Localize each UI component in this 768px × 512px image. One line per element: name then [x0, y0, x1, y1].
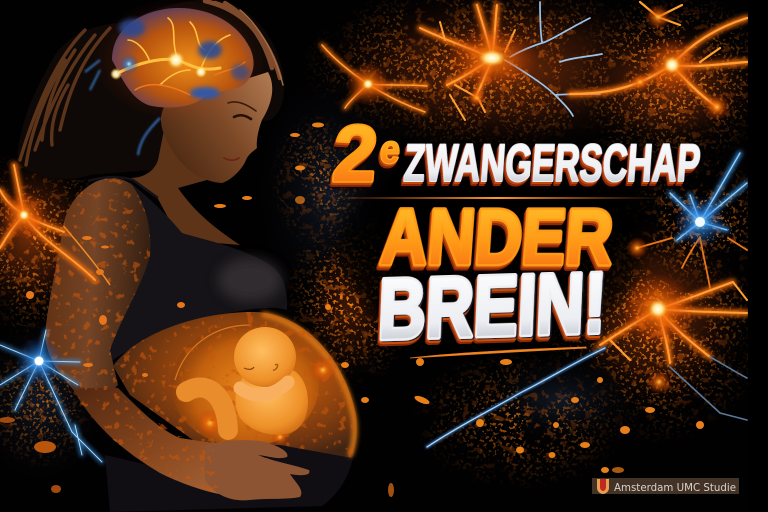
- neural burst: top left orange: [322, 45, 427, 112]
- headline: [328, 108, 702, 358]
- neural burst: large orange lower right: [600, 273, 747, 420]
- fabric highlight on bust: [218, 258, 282, 302]
- ember speckles over arm: [26, 236, 185, 377]
- illustration: pregnant woman: [17, 0, 363, 512]
- blue branches: [505, 2, 602, 116]
- forearm: [67, 378, 245, 495]
- belly: [113, 312, 357, 458]
- neural burst: orange left edge: [0, 165, 95, 280]
- upper arm: [45, 178, 150, 410]
- neural burst: top centre orange: [420, 2, 602, 120]
- neural burst: blue star right: [626, 153, 747, 288]
- face: [161, 72, 272, 183]
- hair: [17, 0, 284, 179]
- blue nerve diagonal lower centre: [427, 348, 605, 447]
- headline: ANDER: ANDER: [378, 192, 616, 281]
- neural burst: top right orange: [570, 2, 747, 120]
- icon: shield logo: [597, 479, 609, 494]
- strap: [88, 177, 158, 198]
- arm texture: [45, 178, 222, 492]
- brain: [85, 0, 268, 122]
- blue nerve down neck: [138, 118, 160, 155]
- headline: 2e: e: [378, 128, 402, 172]
- divider under first line: [328, 197, 666, 199]
- lower belly: [105, 430, 355, 512]
- black top: [100, 182, 287, 362]
- eye and lips: [224, 102, 256, 160]
- hand: [205, 440, 309, 500]
- ember flakes scattered: [0, 122, 704, 497]
- neural burst: blue star left: [0, 330, 102, 462]
- fetus: [186, 327, 308, 435]
- source badge: [592, 478, 739, 494]
- headline: BREIN!: BREIN!: [376, 255, 608, 358]
- headline: 2e: 2: [330, 108, 381, 198]
- swoosh under headline: [410, 347, 586, 358]
- neck and chest: [130, 125, 240, 245]
- badge text: Amsterdam UMC Studie: [614, 481, 736, 494]
- dark backing behind headline: [340, 150, 640, 350]
- womb glow: [113, 312, 363, 462]
- right black margin: [748, 0, 768, 512]
- belly rim glow: [262, 314, 355, 456]
